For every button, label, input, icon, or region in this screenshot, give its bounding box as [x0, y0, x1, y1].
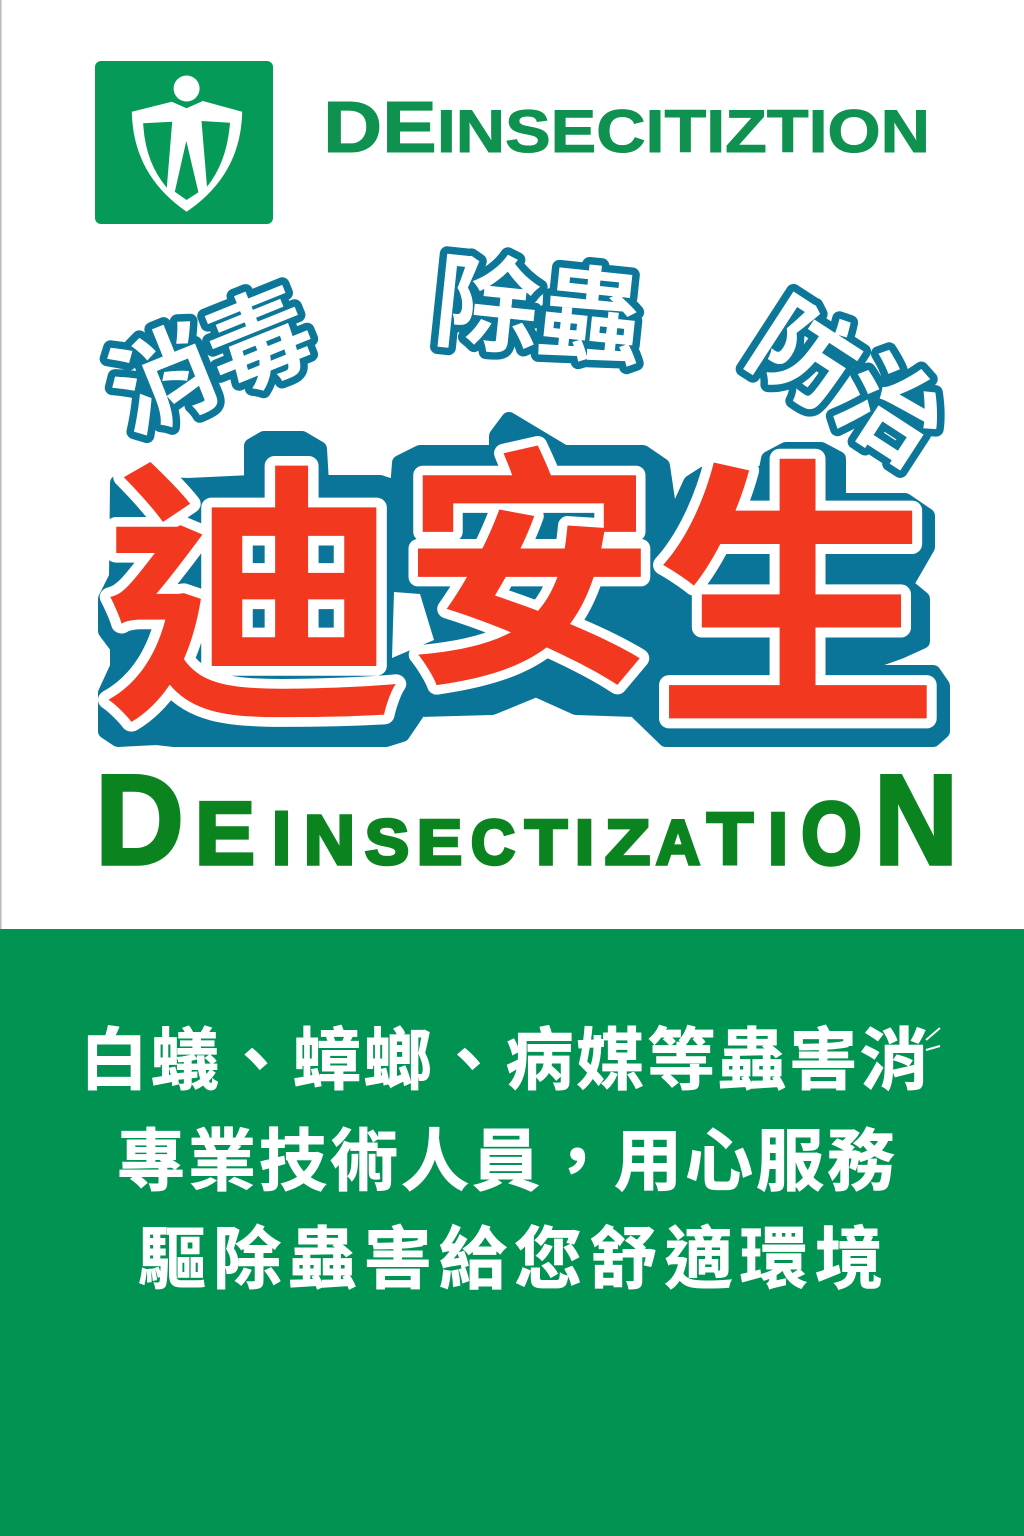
top brand name: DEINSECITIZTION	[323, 88, 930, 168]
english wordmark: E	[417, 808, 462, 878]
tag: 除蟲: 除蟲	[429, 244, 648, 382]
main title: 迪安生: 生	[654, 444, 940, 762]
main title: 迪安生	[103, 420, 942, 762]
english wordmark: N	[304, 801, 355, 879]
main title: 迪安生: 安	[403, 435, 655, 716]
main title: 迪安生: 迪	[103, 447, 403, 756]
english wordmark: T	[525, 808, 567, 878]
main title: 迪安生: 安	[403, 435, 655, 716]
body text line 3: 驅除蟲害給您舒適環境	[138, 1222, 883, 1298]
logo: shield badge	[95, 61, 273, 224]
body text line 2: 專業技術人員，用心服務	[117, 1124, 895, 1200]
english wordmark: I	[272, 796, 291, 880]
body text line 1: 白蟻、蟑螂、病媒等蟲害消	[80, 1023, 928, 1099]
english wordmark: D	[95, 749, 184, 892]
english wordmark: C	[471, 808, 515, 878]
english wordmark: N	[874, 749, 958, 892]
english wordmark: S	[365, 808, 409, 878]
english wordmark: E	[195, 783, 255, 883]
main title: 迪安生: 生	[654, 444, 940, 762]
english wordmark: A	[656, 808, 700, 878]
english wordmark	[95, 749, 958, 892]
green footer panel	[0, 929, 1024, 1536]
english wordmark: O	[801, 783, 862, 883]
english wordmark: I	[768, 799, 788, 880]
tag: 防治: 防治	[730, 279, 965, 488]
english wordmark: T	[707, 799, 753, 880]
english wordmark: I	[575, 808, 594, 878]
tag: 消毒: 消毒	[94, 270, 330, 456]
english wordmark: Z	[605, 808, 650, 878]
main title: 迪安生: 迪	[103, 447, 403, 756]
